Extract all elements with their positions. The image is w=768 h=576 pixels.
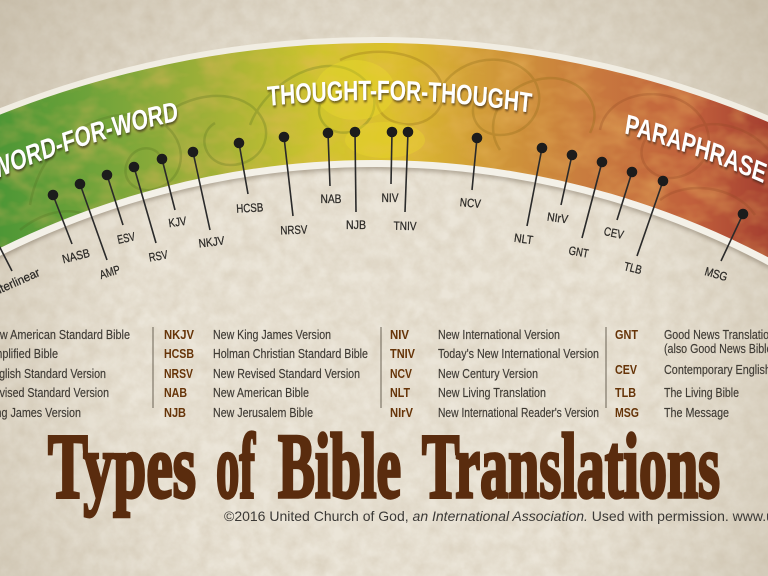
pin: Interlinear xyxy=(0,232,42,299)
pin: NLT: NLT xyxy=(513,231,535,247)
legend column 3: New International Reader's Version xyxy=(438,406,599,420)
pin: GNT: GNT xyxy=(568,243,590,261)
legend column 3: TNIV xyxy=(390,347,416,361)
pin: TLB: TLB xyxy=(623,259,643,277)
pin: CEV xyxy=(603,167,637,242)
ornamental scrollwork xyxy=(20,66,374,230)
legend column 3: New Living Translation xyxy=(438,386,546,400)
pin: NCV: NCV xyxy=(459,195,481,211)
pin: MSG: MSG xyxy=(703,264,729,284)
pin: TNIV xyxy=(393,127,417,233)
legend column 4 xyxy=(615,328,768,420)
pin: NKJV xyxy=(188,147,225,251)
legend column 4: GNT xyxy=(615,328,638,342)
legend column 2: NAB xyxy=(164,386,187,400)
pin: AMP: AMP xyxy=(98,262,122,282)
pin: NIV: NIV xyxy=(382,191,398,205)
pin: NASB: NASB xyxy=(61,246,91,266)
legend column 4: TLB xyxy=(615,386,636,400)
pin: NASB xyxy=(48,190,91,266)
heading: thought-for-thought: THOUGHT-FOR-THOUGHT xyxy=(266,80,534,116)
pin: TLB xyxy=(623,176,668,277)
pin: NCV xyxy=(459,133,482,211)
pin: TNIV: TNIV xyxy=(393,219,417,233)
legend column 4: CEV xyxy=(615,363,638,377)
pin: ESV xyxy=(102,170,136,247)
legend column 3: NLT xyxy=(390,386,410,400)
pin: NIV xyxy=(382,127,398,205)
legend column 4: MSG xyxy=(615,406,639,420)
pin: NRSV: NRSV xyxy=(280,223,308,237)
legend column 2: NJB xyxy=(164,406,186,420)
pin: HCSB: HCSB xyxy=(236,200,264,216)
legend column 3: NIV xyxy=(390,328,410,342)
pin: CEV: CEV xyxy=(603,224,625,242)
legend column 4: The Message xyxy=(664,406,729,420)
pin: NIrV: NIrV xyxy=(546,210,569,226)
pin: ESV: ESV xyxy=(116,229,136,247)
pin: GNT xyxy=(568,157,607,261)
pin: NJB xyxy=(346,127,366,232)
legend column 4: The Living Bible xyxy=(664,386,739,400)
title: Types xyxy=(48,415,196,517)
title xyxy=(48,415,720,517)
legend column 2: New American Bible xyxy=(213,386,309,400)
band shadow xyxy=(0,166,768,288)
legend column 1 xyxy=(0,328,130,420)
pin: NAB xyxy=(320,128,342,206)
legend column 3: NIrV xyxy=(390,406,414,420)
legend column 2: HCSB xyxy=(164,347,194,361)
pin: NAB: NAB xyxy=(320,192,342,206)
pin: NKJV: NKJV xyxy=(198,233,225,251)
pin: MSG xyxy=(703,209,748,284)
pin: HCSB xyxy=(234,138,264,216)
arc band: translation spectrum xyxy=(0,37,768,266)
legend column 2 xyxy=(164,328,368,420)
legend column 3: New International Version xyxy=(438,328,560,342)
pin: NLT xyxy=(513,143,547,247)
legend column 3: NCV xyxy=(390,367,413,381)
pin: RSV: RSV xyxy=(148,248,169,265)
legend column 3 xyxy=(390,328,599,420)
legend column 3: New Century Version xyxy=(438,367,538,381)
legend column 2: NKJV xyxy=(164,328,195,342)
legend column 2: NRSV xyxy=(164,367,194,381)
pin: RSV xyxy=(129,162,169,265)
legend column 3: Today's New International Version xyxy=(438,347,599,361)
pin: AMP xyxy=(75,179,122,282)
title: Bible xyxy=(278,415,401,517)
pin: KJV: KJV xyxy=(168,214,187,230)
legend column 2: Holman Christian Standard Bible xyxy=(213,347,368,361)
pin: NRSV xyxy=(279,132,308,237)
legend column 2: New Jerusalem Bible xyxy=(213,406,313,420)
heading: paraphrase: PARAPHRASE xyxy=(625,114,768,186)
legend column 2: New King James Version xyxy=(213,328,331,342)
legend column 2: New Revised Standard Version xyxy=(213,367,360,381)
pin: KJV xyxy=(157,154,187,230)
title: of xyxy=(216,415,256,517)
pin: NIrV xyxy=(546,150,577,226)
pin: NJB: NJB xyxy=(346,218,366,232)
